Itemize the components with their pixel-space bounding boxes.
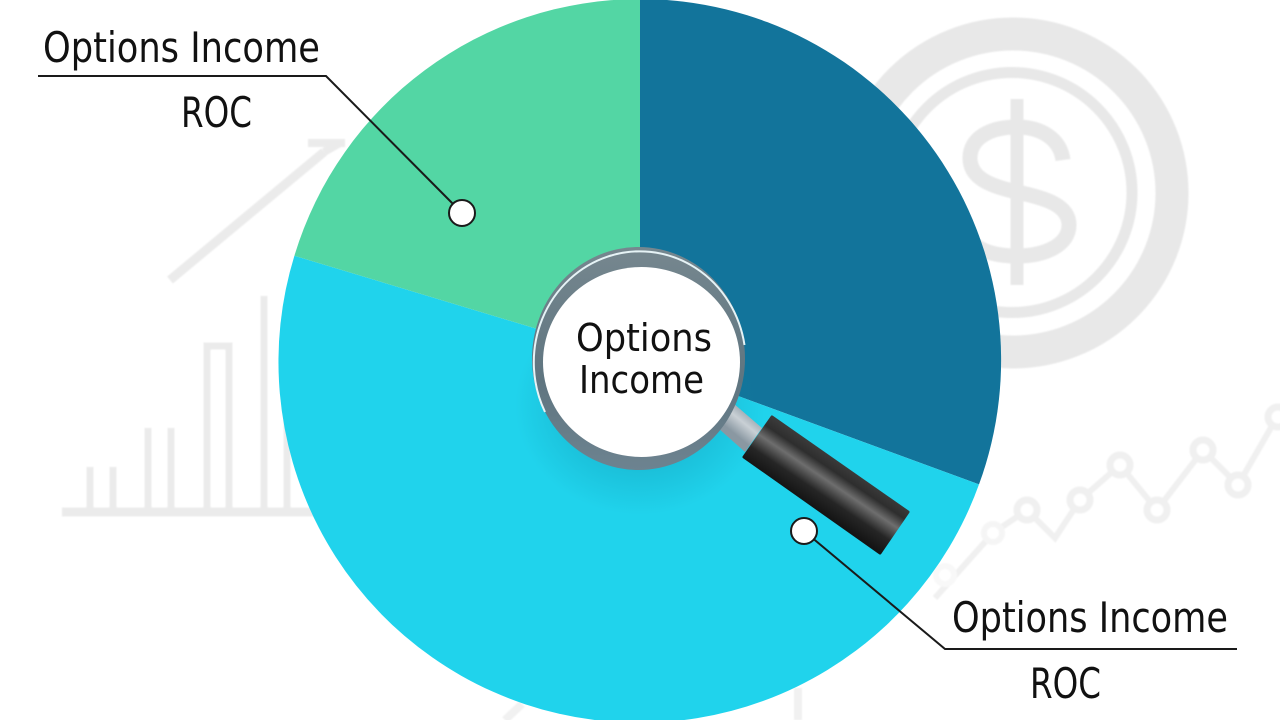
pie chart — [278, 0, 1001, 720]
pie slice: light blue — [278, 256, 979, 720]
icon: magnifying glass — [515, 247, 908, 553]
label: bottom right ROC: ROC — [1030, 659, 1101, 708]
magnifier rim — [532, 247, 745, 470]
label: top left ROC: ROC — [181, 88, 252, 137]
pie slice: green — [294, 0, 640, 360]
background icon: bar chart with rising arrow — [62, 143, 345, 512]
label: top left Options Income: Options Income — [43, 23, 320, 72]
leader line: bottom right callout — [804, 531, 1237, 649]
lens label: Income — [579, 358, 704, 402]
background icon: line graph with circular nodes — [935, 407, 1280, 598]
background icon: dollar coin — [854, 34, 1172, 352]
marker: green slice — [449, 200, 475, 226]
magnifier stem — [718, 403, 762, 452]
pie slice: dark blue — [640, 0, 1001, 484]
label: bottom right Options Income: Options Income — [952, 593, 1228, 642]
lens label — [576, 316, 712, 402]
magnifier lens — [543, 267, 740, 457]
background icon: faint chart at the bottom — [505, 688, 798, 720]
marker: light blue slice — [791, 518, 817, 544]
magnifier handle — [744, 417, 908, 553]
leader line: top left callout — [38, 76, 462, 213]
lens label: Options — [576, 316, 712, 360]
